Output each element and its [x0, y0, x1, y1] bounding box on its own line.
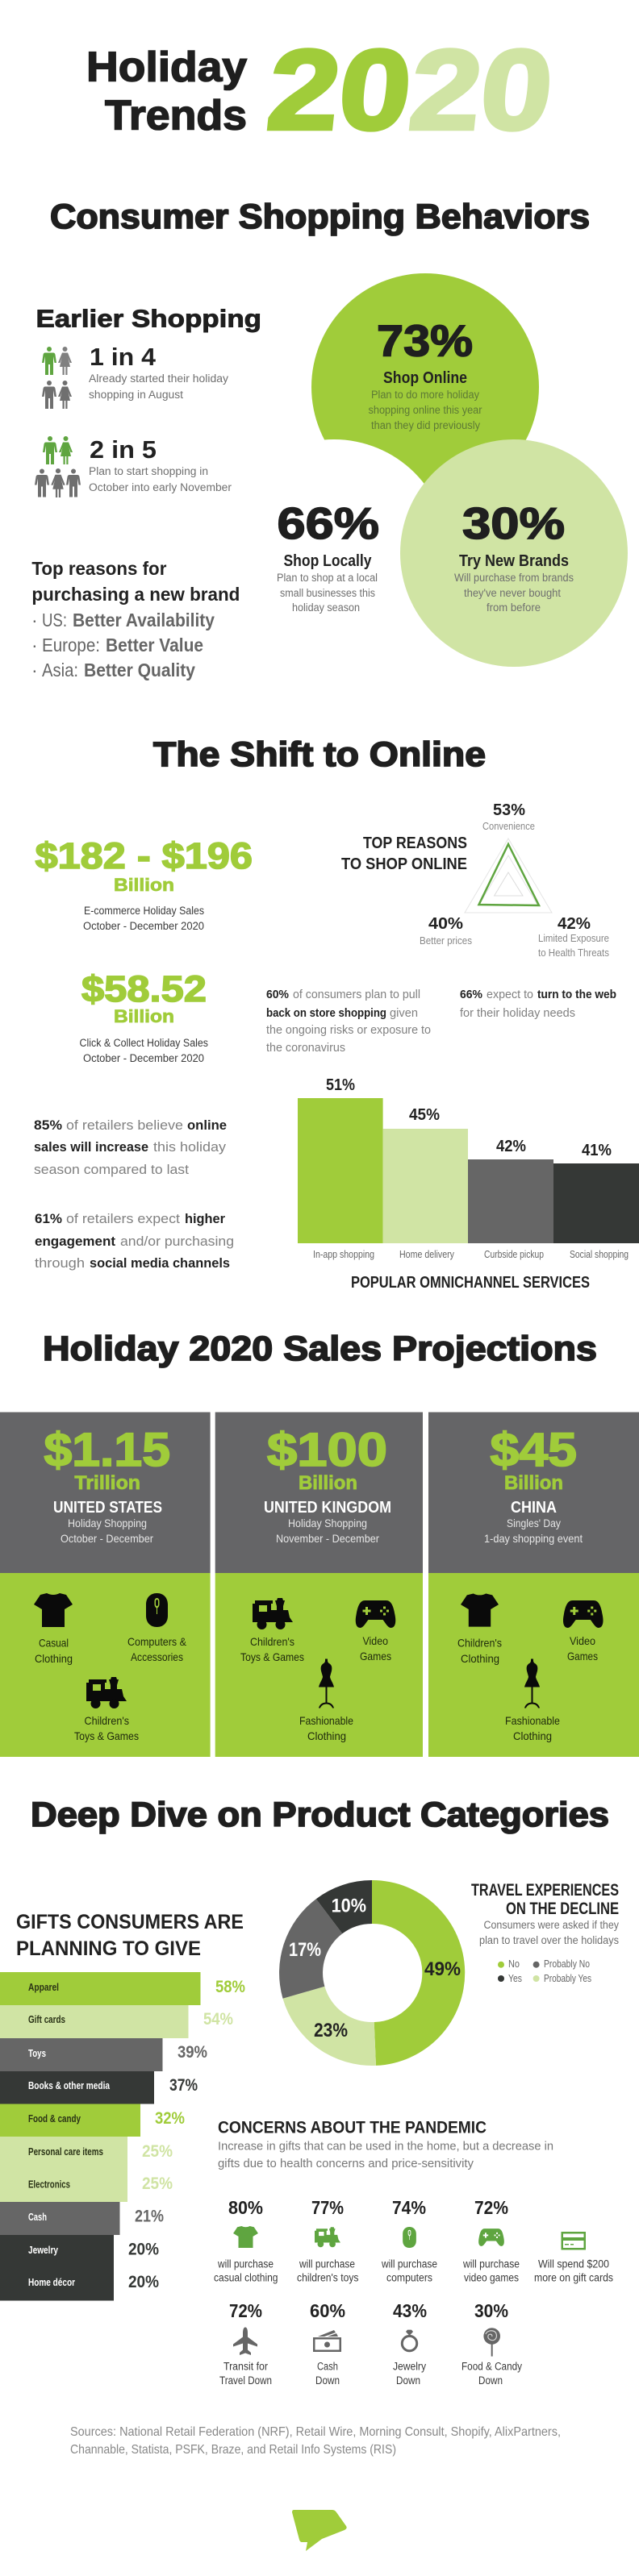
chart title: PLANNING TO GIVE [16, 1937, 201, 1960]
label: better prices: 40% [428, 915, 463, 933]
label: toys: Toys & Games [74, 1729, 139, 1742]
bar labels: Home delivery [399, 1249, 455, 1260]
heading: top reasons to shop online: TO SHOP ONLINE [341, 855, 467, 873]
bar labels: Electronics [28, 2179, 70, 2190]
bar values [326, 1076, 612, 1159]
icon: game controller [356, 1600, 395, 1628]
stat: try new brands: Try New Brands [459, 552, 569, 570]
stat: shop online [368, 316, 482, 431]
projection: $45 [491, 1424, 577, 1476]
stat: try new brands [454, 498, 574, 614]
text block: 61% of retailers: through [35, 1255, 85, 1271]
stat: 2 in 5: October into early November [89, 481, 232, 493]
legend: No [508, 1958, 520, 1970]
stat: click and collect sales: October - December 2020 [83, 1052, 204, 1064]
stat: e-commerce holiday sales [36, 835, 253, 932]
text block: travel experiences: plan to travel over the holidays [479, 1934, 619, 1946]
label: video games: Games [567, 1650, 598, 1663]
label: convenience: 53% [493, 801, 525, 819]
bar values: 32% [155, 2109, 185, 2128]
text block: top reasons for purchasing a new brand [31, 558, 240, 680]
stat: 1 in 4: shopping in August [89, 389, 183, 401]
stat: gift cards [534, 2232, 613, 2284]
legend: Probably Yes [544, 1973, 591, 1984]
chart: gifts consumers are planning to give [0, 1911, 245, 2301]
stat: click and collect sales [79, 968, 208, 1064]
projection: Holiday Shopping [288, 1517, 367, 1529]
stat: food and candy 30%: Down [478, 2374, 503, 2387]
heading: The Shift to Online: The Shift to Online [153, 735, 486, 774]
bar values: 21% [135, 2208, 164, 2226]
text block: 85% of retailers: sales will increase [34, 1139, 148, 1155]
text block: sources: Channable, Statista, PSFK, Braze, and Retail Info Systems (RIS) [70, 2443, 396, 2457]
icon: t-shirt [34, 1593, 73, 1627]
bar: curbside pickup [468, 1159, 553, 1243]
label: toys [74, 1714, 139, 1742]
stat: gift cards: more on gift cards [534, 2272, 613, 2284]
stat: transit 72% [219, 2300, 272, 2387]
projection: $100 [267, 1424, 387, 1476]
text block: top reasons for purchasing a new brand: Asia: [42, 660, 78, 680]
bar values: 42% [496, 1138, 526, 1155]
bar labels: Curbside pickup [484, 1249, 544, 1260]
stat: jewelry 43% [393, 2300, 427, 2387]
stat: casual clothing 80%: will purchase [217, 2258, 274, 2270]
bar values: 37% [169, 2076, 198, 2095]
donut values: 23% [314, 2020, 348, 2041]
text block: 60% pull back: back on store shopping [266, 1006, 386, 1020]
stat: click and collect sales: $58.52 [81, 968, 207, 1009]
circle: try new brands [400, 439, 628, 667]
text block: 61% of retailers: and/or purchasing [120, 1234, 234, 1249]
header background [428, 1413, 639, 1573]
bar: in-app shopping [298, 1098, 383, 1243]
bar values: 41% [582, 1142, 612, 1159]
text block: 61% of retailers: social media channels [90, 1255, 230, 1271]
chart title: POPULAR OMNICHANNEL SERVICES [351, 1274, 590, 1292]
chart title [16, 1911, 244, 1960]
donut values [289, 1896, 461, 2041]
label: better prices: Better prices [420, 935, 472, 947]
icon: mannequin [319, 1659, 334, 1708]
panel: united states [0, 1413, 211, 1757]
stat: casual clothing 80%: 80% [228, 2197, 263, 2218]
bar: home delivery [383, 1129, 468, 1243]
bar labels: Gift cards [28, 2014, 65, 2025]
stat: shop locally: Plan to shop at a local [277, 572, 378, 584]
projection: Billion [504, 1472, 563, 1494]
projection: CHINA [511, 1499, 557, 1517]
circle: shop locally [220, 439, 448, 667]
label: video games [567, 1634, 598, 1663]
label: casual clothing: Casual [39, 1637, 69, 1650]
icon: mannequin [524, 1659, 540, 1708]
stat: e-commerce holiday sales: E-commerce Holiday Sales [84, 905, 204, 917]
stat: cash 60% [310, 2300, 345, 2387]
text block: 60% pull back: the coronavirus [266, 1041, 345, 1055]
label: children's clothing: Clothing [461, 1652, 499, 1665]
bar values: 20% [128, 2273, 159, 2291]
text block: top reasons for purchasing a new brand: Europe: [42, 635, 100, 655]
panel: united kingdom [215, 1413, 423, 1757]
text block: 85% of retailers: 85% [34, 1117, 62, 1133]
categories background [428, 1573, 639, 1757]
bar labels: Home décor [28, 2277, 75, 2288]
header background [0, 1413, 211, 1573]
projection: Singles' Day [507, 1517, 561, 1529]
panel: concerns about the pandemic [214, 2119, 613, 2387]
circle: shop online [311, 273, 539, 501]
heading: top reasons to shop online [341, 834, 467, 873]
stat: children's toys 77%: will purchase [299, 2258, 355, 2270]
stat: video games 72%: 72% [474, 2197, 508, 2218]
stat: shop online: than they did previously [371, 419, 480, 431]
text block: 60% pull back [266, 988, 431, 1055]
stat: casual clothing 80% [214, 2197, 278, 2284]
label: casual clothing [35, 1637, 73, 1665]
title words: Holiday Trends [86, 44, 247, 139]
projection: UNITED STATES [53, 1499, 162, 1517]
text block: 61% of retailers: engagement [35, 1234, 115, 1249]
text block: 60% pull back: 60% [266, 988, 289, 1001]
projection [484, 1424, 583, 1545]
segment: yes 10% [316, 1880, 372, 1933]
stat: click and collect sales: Billion [114, 1006, 174, 1026]
label: children's clothing [457, 1637, 502, 1665]
stat: computers 74% [381, 2197, 437, 2284]
legend: Probably No [544, 1958, 590, 1970]
text block: 60% pull back: of consumers plan to pull [293, 988, 420, 1001]
icon: toy train [253, 1598, 293, 1629]
title year: 2020: 20 [404, 26, 558, 153]
label: convenience [482, 801, 535, 832]
stat: shop locally: Shop Locally [284, 552, 372, 570]
stat: shop online: Shop Online [383, 369, 467, 387]
text block: 66% turn to web [460, 988, 616, 1020]
radar triangles [465, 839, 552, 913]
stat: shop locally: 66% [278, 498, 379, 548]
bar labels: Apparel [28, 1982, 59, 1993]
projection: October - December [61, 1532, 153, 1545]
bar values [128, 1978, 245, 2291]
icon: people 1 in 4 [42, 347, 72, 409]
bars [0, 1972, 200, 2301]
stat: children's toys 77%: children's toys [297, 2272, 359, 2284]
text block: 61% of retailers: 61% [35, 1211, 62, 1226]
bar labels: In-app shopping [313, 1249, 374, 1260]
bar labels: Personal care items [28, 2146, 103, 2158]
icon: logo speech bubble [292, 2510, 347, 2551]
stat: video games 72%: will purchase [462, 2258, 520, 2270]
heading: Holiday 2020 Sales Projections: Holiday 2020 Sales Projections [43, 1330, 597, 1368]
text block: 66% turn to web: turn to the web [537, 988, 616, 1001]
stat: shop online: 73% [377, 316, 473, 366]
header background [215, 1413, 423, 1573]
stat: e-commerce holiday sales: October - December 2020 [83, 920, 204, 932]
heading and intro [218, 2119, 553, 2170]
text block: 60% pull back: the ongoing risks or exposure to [266, 1023, 431, 1037]
donut values: 17% [289, 1939, 321, 1961]
stat: computers 74%: computers [386, 2272, 432, 2284]
stat: click and collect sales: Click & Collect Holiday Sales [79, 1037, 208, 1049]
text block: travel experiences [471, 1881, 619, 1946]
text block: 66% turn to web: for their holiday needs [460, 1006, 575, 1020]
stat: shop locally [277, 498, 379, 614]
projection [44, 1424, 170, 1545]
label: video games [360, 1634, 391, 1663]
projection: Trillion [74, 1472, 140, 1494]
label: toys [240, 1635, 304, 1663]
title year: 2020 [262, 26, 558, 153]
text block: sources [70, 2425, 561, 2457]
bar values: 45% [409, 1106, 440, 1124]
legend [498, 1958, 591, 1984]
bar labels [313, 1249, 629, 1260]
label: convenience: Convenience [482, 821, 535, 832]
bar labels: Social shopping [570, 1249, 629, 1260]
bar labels: Jewelry [28, 2245, 58, 2256]
heading: top reasons to shop online: TOP REASONS [363, 834, 467, 852]
text block: top reasons for purchasing a new brand: Top reasons for [31, 558, 166, 579]
stat: transit 72%: Transit for [223, 2361, 268, 2373]
stat: transit 72%: Travel Down [219, 2374, 272, 2387]
label: fashionable clothing: Fashionable [299, 1714, 353, 1727]
stat: computers 74%: 74% [392, 2197, 426, 2218]
text block: 66% turn to web: 66% [460, 988, 482, 1001]
heading: Deep Dive on Product Categories: Deep Dive on Product Categories [31, 1796, 609, 1834]
stat: 2 in 5 [89, 435, 232, 493]
bar: social shopping [553, 1163, 639, 1243]
stat: casual clothing 80%: casual clothing [214, 2272, 278, 2284]
title [86, 26, 558, 153]
donut values: 49% [424, 1958, 461, 1980]
stat: 1 in 4: 1 in 4 [90, 343, 157, 371]
projection: $1.15 [44, 1424, 170, 1476]
label: video games: Games [360, 1650, 391, 1663]
stat: video games 72% [462, 2197, 520, 2284]
label: toys: Toys & Games [240, 1650, 304, 1663]
stat: try new brands: 30% [462, 498, 565, 548]
panel: earlier shopping [35, 305, 261, 497]
bar values: 20% [128, 2241, 159, 2259]
bar labels: Food & candy [28, 2113, 81, 2124]
stat: cash 60%: Cash [317, 2361, 338, 2373]
chart title: GIFTS CONSUMERS ARE [16, 1911, 244, 1933]
bar values: 51% [326, 1076, 355, 1094]
segment: probably yes 23% [282, 1987, 376, 2066]
bar labels: Cash [28, 2212, 47, 2223]
label: casual clothing: Clothing [35, 1652, 73, 1665]
stat: video games 72%: video games [464, 2272, 519, 2284]
text block: 66% turn to web: expect to [487, 988, 533, 1001]
projection: 1-day shopping event [484, 1532, 583, 1545]
label: video games: Video [363, 1634, 388, 1647]
text block: top reasons for purchasing a new brand: US: [42, 610, 67, 630]
stat: 1 in 4 [89, 343, 228, 401]
stat: transit 72%: 72% [229, 2300, 262, 2321]
segment: no 49% [372, 1880, 465, 2066]
stat: children's toys 77%: 77% [311, 2197, 344, 2218]
stat: e-commerce holiday sales: Billion [114, 875, 174, 895]
stat: jewelry 43%: Down [396, 2374, 420, 2387]
label: fashionable clothing [505, 1714, 560, 1742]
label: video games: Video [570, 1634, 595, 1647]
title words: Holiday Trends: Trends [105, 93, 247, 139]
label: limited exposure: 42% [558, 915, 591, 933]
heading: Consumer Shopping Behaviors: Consumer Shopping Behaviors [50, 198, 590, 236]
text block: top reasons for purchasing a new brand: · [31, 635, 38, 655]
bar values: 54% [203, 2010, 233, 2029]
text block: top reasons for purchasing a new brand: Better Quality [84, 660, 195, 680]
bar labels: Books & other media [28, 2080, 111, 2091]
stat: cash 60%: 60% [310, 2300, 345, 2321]
stat: food and candy 30%: Food & Candy [461, 2361, 522, 2373]
label: fashionable clothing: Clothing [513, 1729, 552, 1742]
label: limited exposure: to Health Threats [538, 947, 609, 959]
stat: computers 74%: will purchase [381, 2258, 437, 2270]
label: toys: Children's [84, 1714, 129, 1727]
label: fashionable clothing: Fashionable [505, 1714, 560, 1727]
text block: sources: Sources: National Retail Federation (NRF), Retail Wire, Morning Consult, Shopify, AlixPartners, [70, 2425, 561, 2439]
label: computers: Accessories [131, 1650, 183, 1663]
stat: e-commerce holiday sales: $182 - $196 [36, 835, 253, 876]
label: toys: Children's [250, 1635, 294, 1648]
text block: top reasons for purchasing a new brand: Better Availability [73, 610, 215, 630]
stat: jewelry 43%: 43% [393, 2300, 427, 2321]
segment: probably no 17% [279, 1899, 342, 1999]
text block: travel experiences: Consumers were asked if they [484, 1919, 619, 1931]
text block: top reasons for purchasing a new brand: · [31, 610, 38, 630]
text block: top reasons for purchasing a new brand: Better Value [106, 635, 203, 655]
icon: people 2 in 5 [35, 436, 81, 497]
label: children's clothing: Children's [457, 1637, 502, 1650]
title words: Holiday Trends: Holiday [86, 44, 247, 91]
bar labels [28, 1982, 111, 2288]
text block: 85% of retailers: this holiday [153, 1139, 227, 1155]
text block: 61% of retailers [35, 1211, 234, 1271]
chart: travel donut [279, 1880, 465, 2066]
stat: 1 in 4: Already started their holiday [89, 372, 228, 385]
heading and intro: CONCERNS ABOUT THE PANDEMIC [218, 2119, 487, 2137]
stat: gift cards: Will spend $200 [538, 2258, 609, 2270]
chart: popular omnichannel services [298, 1076, 639, 1292]
stat: try new brands: Will purchase from brands [454, 572, 574, 584]
bar values: 58% [215, 1978, 245, 1996]
icon: mouse [146, 1593, 168, 1627]
label: limited exposure: Limited Exposure [538, 933, 609, 944]
text block: 61% of retailers: of retailers expect [66, 1211, 180, 1226]
panel: china [428, 1413, 639, 1757]
bar labels: Toys [28, 2048, 46, 2059]
stat: shop online: Plan to do more holiday [371, 389, 479, 401]
text block: 85% of retailers: season compared to last [34, 1162, 189, 1177]
projection: Holiday Shopping [68, 1517, 147, 1529]
label: better prices [420, 915, 472, 947]
stat: shop online: shopping online this year [368, 404, 482, 416]
bar values: 25% [142, 2142, 173, 2161]
stat: shop locally: small businesses this [280, 587, 375, 599]
icon: toy train [86, 1677, 127, 1708]
text block: 61% of retailers: higher [185, 1211, 225, 1226]
chart: top reasons radar [341, 801, 609, 959]
icon: t-shirt [461, 1593, 499, 1627]
legend: Yes [508, 1973, 522, 1984]
text block: 60% pull back: given [390, 1006, 418, 1020]
panel: circles [220, 273, 628, 667]
projection: Billion [299, 1472, 357, 1494]
text block: 85% of retailers: online [187, 1117, 227, 1133]
stat: shop locally: holiday season [292, 601, 360, 614]
label: computers: Computers & [127, 1635, 187, 1648]
bar values: 39% [178, 2043, 207, 2062]
label: fashionable clothing: Clothing [307, 1729, 346, 1742]
categories background [0, 1573, 211, 1757]
label: limited exposure [538, 915, 609, 959]
stat: cash 60%: Down [315, 2374, 340, 2387]
stat: food and candy 30%: 30% [474, 2300, 508, 2321]
heading: Earlier Shopping: Earlier Shopping [36, 305, 261, 333]
text block: 85% of retailers [34, 1117, 227, 1177]
projection [264, 1424, 391, 1545]
stat: children's toys 77% [297, 2197, 359, 2284]
stat: food and candy 30% [461, 2300, 522, 2387]
bar values: 25% [142, 2174, 173, 2193]
stat: jewelry 43%: Jewelry [393, 2361, 426, 2373]
heading and intro: Increase in gifts that can be used in the home, but a decrease in [218, 2139, 553, 2153]
title year: 2020: 20 [262, 26, 417, 153]
stat: try new brands: from before [487, 601, 541, 614]
stat: try new brands: they've never bought [464, 587, 561, 599]
label: computers [127, 1635, 187, 1663]
projection: November - December [276, 1532, 379, 1545]
label: fashionable clothing [299, 1714, 353, 1742]
stat: 2 in 5: Plan to start shopping in [89, 465, 208, 477]
heading and intro: gifts due to health concerns and price-sensitivity [218, 2157, 474, 2170]
categories background [215, 1573, 423, 1757]
projection: UNITED KINGDOM [264, 1499, 391, 1517]
text block: top reasons for purchasing a new brand: · [31, 660, 38, 680]
stat: 2 in 5: 2 in 5 [90, 435, 157, 464]
text block: 85% of retailers: of retailers believe [66, 1117, 183, 1133]
icon: game controller [563, 1600, 604, 1628]
text block: top reasons for purchasing a new brand: purchasing a new brand [31, 584, 240, 605]
donut values: 10% [332, 1896, 366, 1917]
